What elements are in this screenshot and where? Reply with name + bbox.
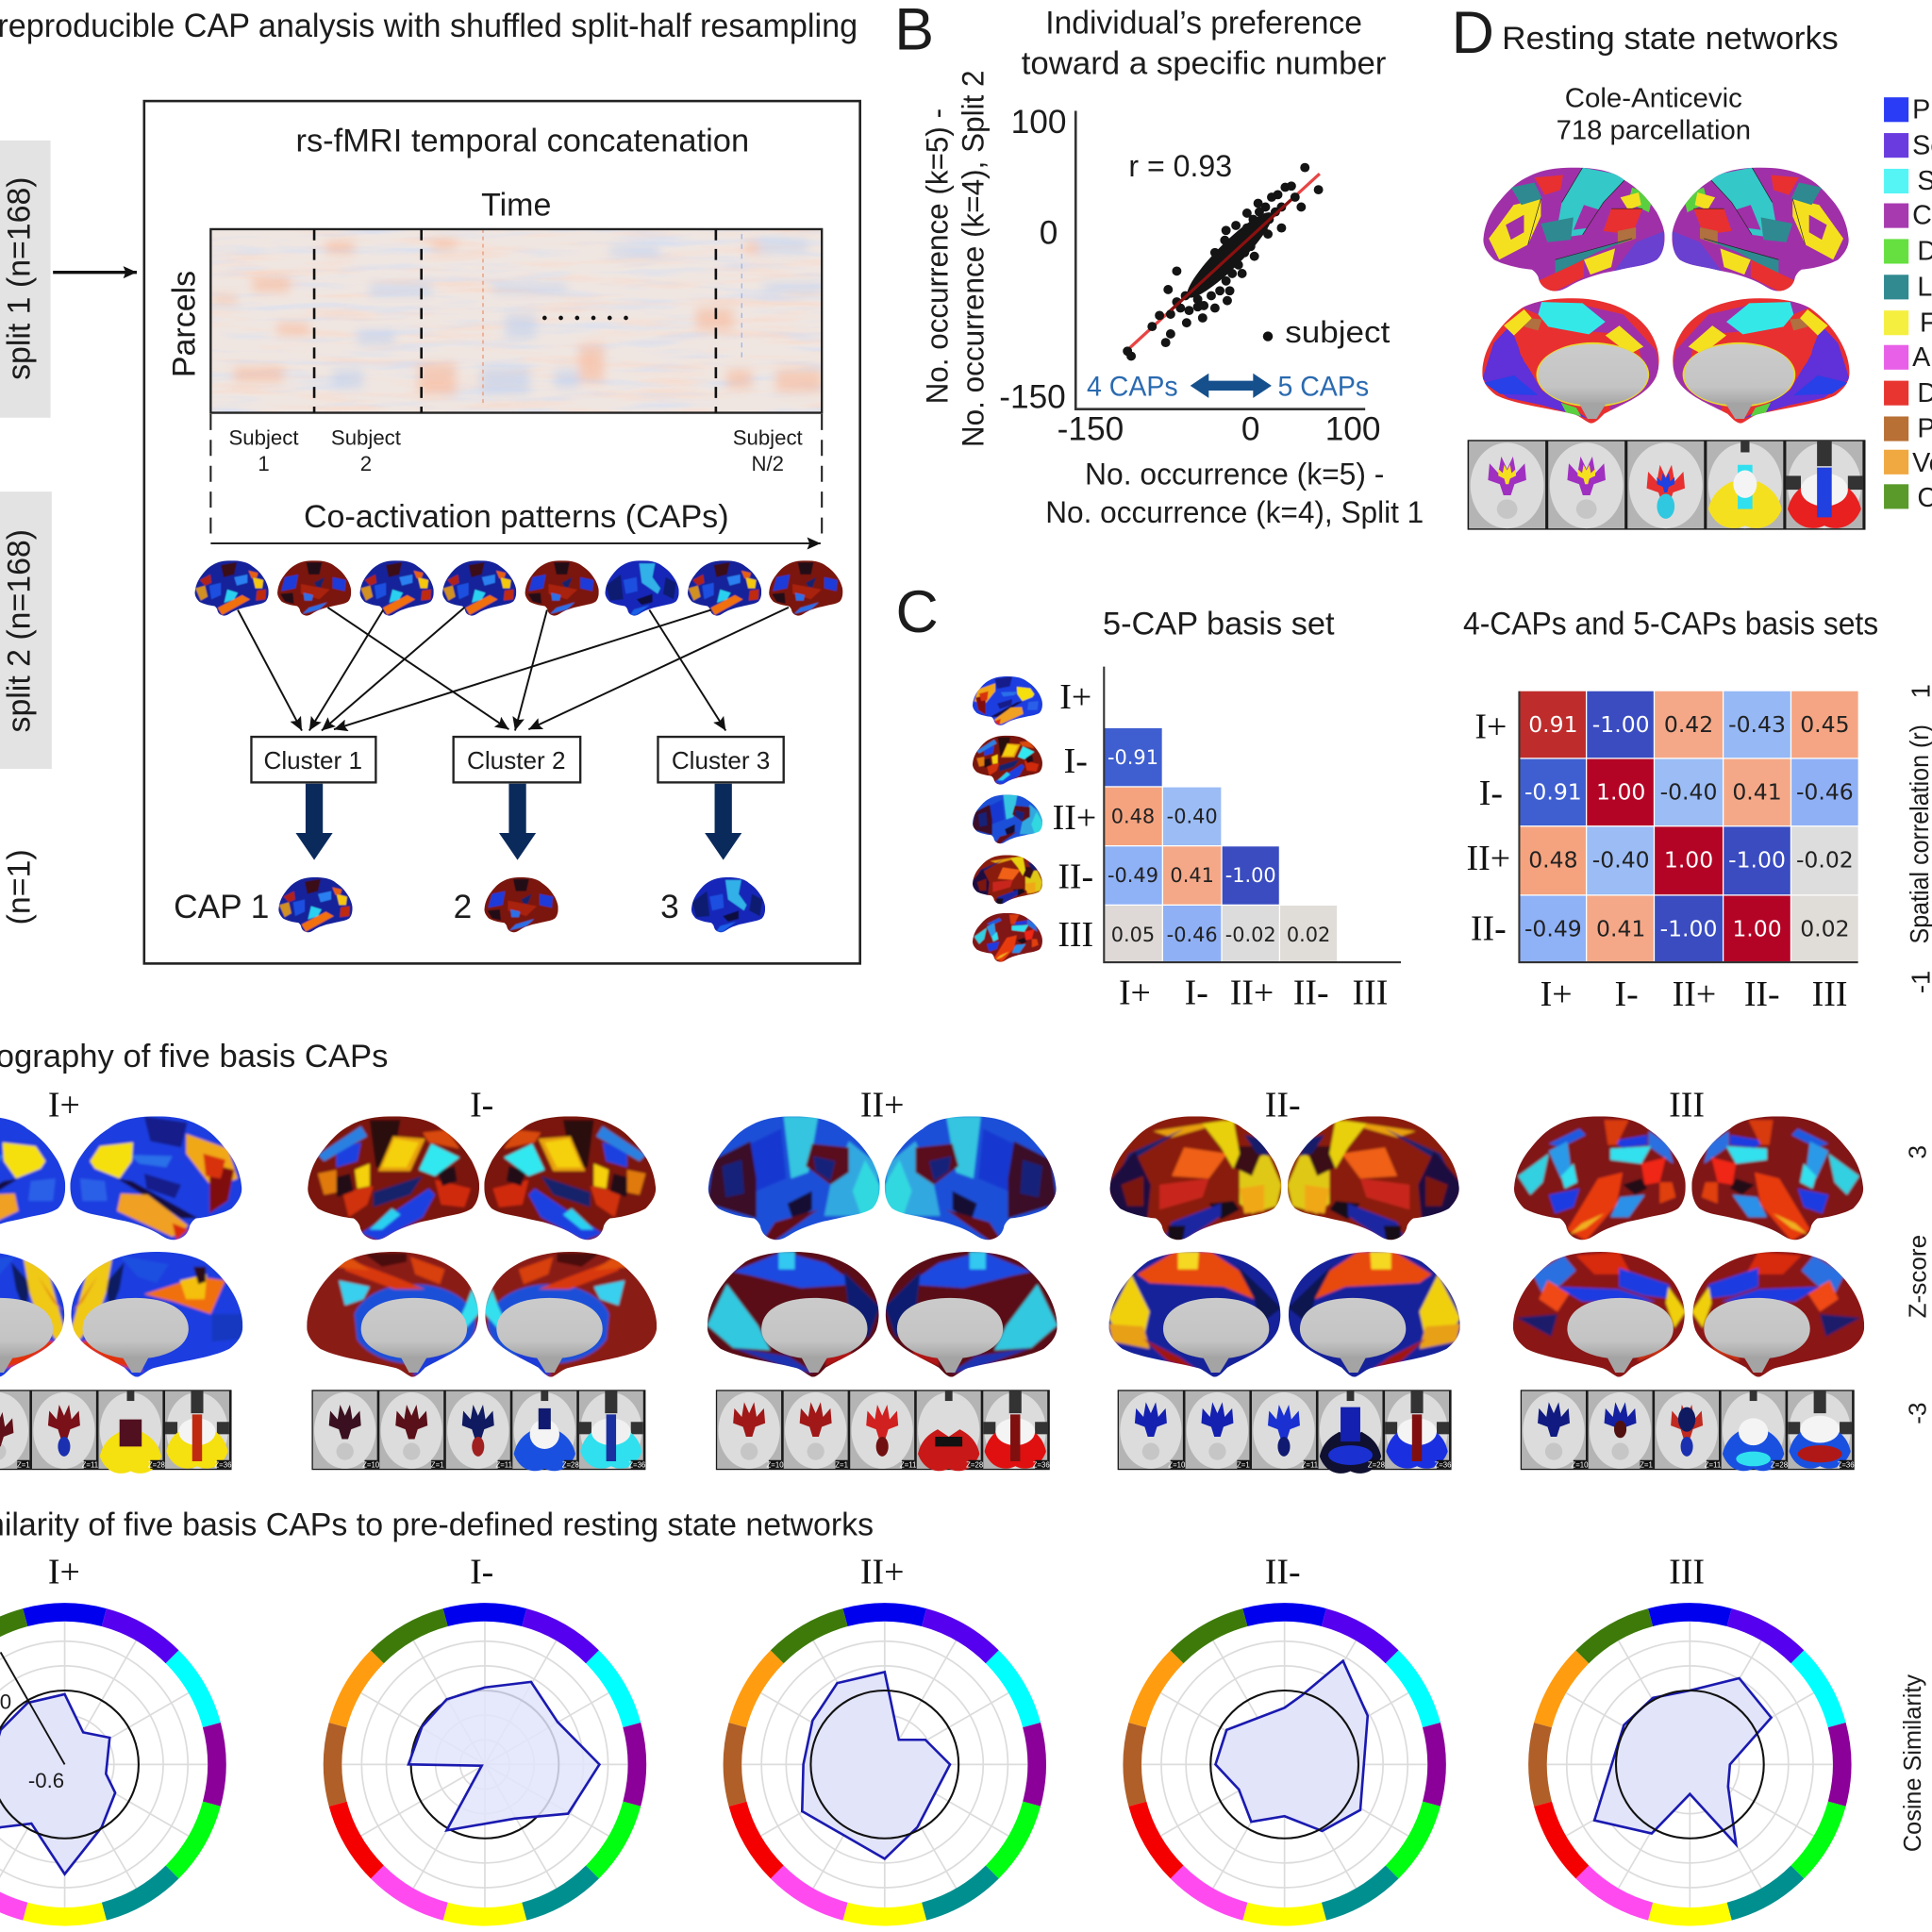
- colorbar label: cosine similarity: Cosine Similarity: [1898, 1674, 1926, 1852]
- cluster boxes: Cluster 1: [264, 746, 362, 774]
- row and column labels, right matrix: II-: [1471, 909, 1507, 949]
- tick labels: 0: [1040, 215, 1058, 252]
- subheading: parcellation: [1557, 84, 1751, 146]
- full matrix: 4-CAPs and 5-CAPs: -0.40: [1592, 847, 1650, 874]
- cluster boxes: Cluster 2: [467, 746, 566, 774]
- row and column labels, left matrix: II-: [1058, 858, 1093, 897]
- y axis label: No. occurrence (k=5) -: [919, 108, 954, 404]
- column labels: I-: [470, 1085, 493, 1124]
- panel letter C: C: [896, 579, 939, 645]
- radar: II-: [1132, 1612, 1437, 1917]
- colorbar labels: z-score: 3: [1903, 1145, 1931, 1158]
- triangular matrix: 5-CAP basis set: -0.46: [1167, 924, 1218, 946]
- full matrix: 4-CAPs and 5-CAPs: 0.42: [1664, 711, 1713, 738]
- slices: I+: [0, 1390, 232, 1474]
- annotation: 4 CAPs vs 5 CAPs: 5 CAPs: [1277, 371, 1369, 402]
- subject labels: Subject: [733, 426, 803, 450]
- full matrix: 4-CAPs and 5-CAPs: 1.00: [1664, 847, 1713, 874]
- triangular matrix: 5-CAP basis set: 0.48: [1111, 805, 1155, 827]
- heading: 5-CAP basis set: 5-CAP basis set: [1103, 607, 1335, 642]
- slices: II+: [716, 1390, 1050, 1471]
- full matrix: 4-CAPs and 5-CAPs: 0.41: [1732, 779, 1782, 806]
- panel letter D: D: [1452, 0, 1494, 66]
- axes: [1075, 111, 1365, 409]
- column labels: I-: [470, 1552, 493, 1591]
- bracket arrow: co-activation patterns: [210, 414, 822, 543]
- brain maps: II-: [1103, 1110, 1466, 1385]
- subject labels: Subject: [229, 426, 299, 450]
- legend: subject: subject: [1285, 314, 1390, 349]
- full matrix: 4-CAPs and 5-CAPs: -1.00: [1660, 916, 1717, 942]
- full matrix: 4-CAPs and 5-CAPs: -0.91: [1524, 779, 1582, 806]
- panel F: cosine similarity radars: [0, 1507, 1926, 1917]
- x axis label: No. occurrence (k=5) -: [1085, 456, 1384, 491]
- column labels: II+: [860, 1552, 904, 1591]
- network legend: L: [1917, 272, 1932, 302]
- network legend: C: [1912, 201, 1932, 231]
- row and column labels, left matrix: III: [1352, 973, 1388, 1012]
- full matrix: 4-CAPs and 5-CAPs: -0.02: [1796, 847, 1854, 874]
- row and column labels, left matrix: I-: [1064, 741, 1088, 781]
- triangular matrix: 5-CAP basis set: -0.91: [1108, 746, 1158, 769]
- correlation value: r = 0.93: [1128, 148, 1232, 183]
- tick labels: -150: [999, 378, 1066, 415]
- full matrix: 4-CAPs and 5-CAPs: -0.40: [1660, 779, 1717, 806]
- brain maps: I+: [0, 1110, 249, 1385]
- full matrix: 4-CAPs and 5-CAPs: 1.00: [1596, 779, 1645, 806]
- brain maps: I-: [301, 1110, 663, 1385]
- resulting CAPs: 3: [660, 889, 679, 925]
- slices: II-: [1118, 1390, 1452, 1474]
- radar: I+: -0.6: [28, 1769, 64, 1792]
- CAP brain icons: [970, 674, 1045, 966]
- full matrix: 4-CAPs and 5-CAPs: 1.00: [1732, 916, 1782, 942]
- panel A: reproducible CAP analysis: [0, 8, 860, 963]
- colorbar labels: z-score: -3: [1903, 1403, 1931, 1424]
- row and column labels, left matrix: I+: [1059, 677, 1091, 717]
- triangular matrix: 5-CAP basis set: 0.05: [1111, 924, 1155, 946]
- split 2 label: split 2 (n=168): [1, 529, 37, 732]
- triangular matrix: 5-CAP basis set: -0.40: [1167, 805, 1218, 827]
- column labels: III: [1669, 1552, 1705, 1591]
- column labels: II+: [860, 1085, 904, 1124]
- tick labels: 100: [1011, 104, 1066, 141]
- full matrix: 4-CAPs and 5-CAPs: [1519, 691, 1858, 962]
- cluster boxes: Cluster 3: [672, 746, 770, 774]
- radar: I-: [333, 1612, 637, 1917]
- thick arrows: cluster to CAP: [295, 784, 741, 860]
- arrows: brains to clusters: [238, 608, 789, 731]
- radar: I+: [0, 1612, 217, 1917]
- full matrix: 4-CAPs and 5-CAPs: 0.48: [1528, 847, 1578, 874]
- heading: individual's preference: toward a specific number: [1022, 45, 1386, 81]
- colorbar labels: z-score: Z-score: [1903, 1235, 1931, 1318]
- network legend: [1884, 94, 1932, 513]
- full matrix: 4-CAPs and 5-CAPs: -0.49: [1524, 916, 1582, 942]
- row and column labels, right matrix: III: [1812, 974, 1848, 1014]
- annotation: 4 CAPs vs 5 CAPs: [1087, 371, 1369, 402]
- radar: I+: 0: [0, 1690, 11, 1714]
- heading: panel A title: reproducible CAP analysis with shuffled split-half resampling: [0, 8, 858, 44]
- subject labels: Subject: [331, 426, 401, 450]
- x axis label: [1045, 456, 1424, 529]
- panel D: resting state networks: [1452, 0, 1932, 530]
- x axis label: No. occurrence (k=4), Split 1: [1045, 494, 1424, 529]
- column labels: I+: [48, 1552, 80, 1591]
- column labels: II-: [1265, 1085, 1301, 1124]
- resulting CAPs: [174, 874, 768, 937]
- annotation: 4 CAPs vs 5 CAPs: 4 CAPs: [1087, 371, 1178, 402]
- mini brains row: [192, 558, 845, 620]
- triangular matrix: 5-CAP basis set: -0.02: [1225, 924, 1276, 946]
- panel E: topography: [0, 1039, 1931, 1474]
- triangular matrix: 5-CAP basis set: [1104, 667, 1401, 962]
- label: Time: Time: [481, 188, 551, 224]
- subject labels: 2: [360, 452, 372, 475]
- full matrix: 4-CAPs and 5-CAPs: 0.45: [1800, 711, 1850, 738]
- subheading: parcellation: Cole-Anticevic: [1565, 84, 1742, 114]
- row and column labels, right matrix: I+: [1541, 974, 1573, 1014]
- row and column labels, left matrix: I+: [1119, 973, 1151, 1012]
- heatmap: parcels by time: [210, 229, 822, 413]
- heading: individual's preference: [1022, 5, 1386, 81]
- y axis label: [919, 70, 990, 447]
- label: co-activation patterns: Co-activation patterns (CAPs): [304, 499, 729, 535]
- colorbar labels: z-score: [1903, 1145, 1931, 1424]
- radar: II+: [732, 1612, 1037, 1917]
- tick labels: 100: [1325, 410, 1381, 447]
- brain maps: II+: [701, 1110, 1063, 1385]
- row and column labels, right matrix: I-: [1479, 774, 1503, 813]
- full matrix: 4-CAPs and 5-CAPs: 0.41: [1596, 916, 1645, 942]
- subject labels: 1: [258, 452, 270, 475]
- row and column labels, right matrix: I+: [1474, 707, 1507, 746]
- triangular matrix: 5-CAP basis set: 0.41: [1170, 864, 1214, 887]
- y axis label: No. occurrence (k=4), Split 2: [955, 70, 990, 447]
- tick labels: [999, 104, 1381, 447]
- triangular matrix: 5-CAP basis set: -0.49: [1108, 864, 1158, 887]
- radar: III: [1538, 1612, 1842, 1917]
- row and column labels, right matrix: [1467, 707, 1848, 1014]
- row and column labels, right matrix: I-: [1614, 974, 1639, 1014]
- full matrix: 4-CAPs and 5-CAPs: -0.43: [1728, 711, 1786, 738]
- heading: 4-CAPs and 5-CAPs: 4-CAPs and 5-CAPs basis sets: [1463, 607, 1878, 642]
- column labels: I+: [48, 1085, 80, 1124]
- split 1 label: [0, 141, 51, 418]
- triangular matrix: 5-CAP basis set: 0.02: [1287, 924, 1330, 946]
- heading: rs-fMRI: rs-fMRI temporal concatenation: [295, 124, 749, 159]
- full matrix: 4-CAPs and 5-CAPs: 0.02: [1800, 916, 1850, 942]
- resulting CAPs: 2: [454, 889, 472, 925]
- row and column labels, left matrix: II+: [1230, 973, 1274, 1012]
- atlas slices: [1468, 440, 1866, 530]
- column labels: [48, 1085, 1705, 1124]
- row and column labels, left matrix: II+: [1053, 798, 1096, 838]
- row and column labels, left matrix: I-: [1185, 973, 1208, 1012]
- tick labels: 0: [1241, 410, 1260, 447]
- label: Parcels: Parcels: [166, 271, 202, 377]
- full matrix: 4-CAPs and 5-CAPs: -1.00: [1728, 847, 1786, 874]
- row and column labels, right matrix: II+: [1673, 974, 1716, 1014]
- panel C: correlation matrices: [896, 579, 1932, 1014]
- n=1 label: (n=1): [1, 849, 37, 924]
- split 1 label: split 1 (n=168): [1, 176, 37, 380]
- column labels: III: [1669, 1085, 1705, 1124]
- heading: individual's preference: Individual’s preference: [1045, 5, 1362, 41]
- row and column labels, left matrix: III: [1058, 915, 1093, 955]
- slices: I-: [311, 1390, 646, 1471]
- tick labels: -150: [1058, 410, 1124, 447]
- column labels: [48, 1552, 1705, 1591]
- brain atlas views: [1475, 161, 1856, 431]
- brain maps: III: [1507, 1110, 1871, 1385]
- full matrix: 4-CAPs and 5-CAPs: -0.46: [1796, 779, 1854, 806]
- row and column labels, left matrix: II-: [1293, 973, 1329, 1012]
- slices: III: [1521, 1390, 1855, 1471]
- triangular matrix: 5-CAP basis set: -1.00: [1225, 864, 1276, 887]
- row and column labels, right matrix: II-: [1744, 974, 1780, 1014]
- subject labels: N/2: [751, 452, 784, 475]
- subheading: parcellation: 718 parcellation: [1557, 116, 1751, 146]
- split 2 label: [0, 491, 52, 769]
- resulting CAPs: CAP 1: [174, 889, 269, 925]
- heading: resting state networks: Resting state networks: [1502, 21, 1839, 57]
- cluster boxes: [251, 737, 784, 782]
- scatter points: [1126, 168, 1320, 356]
- box: temporal concatenation workflow: [144, 101, 860, 963]
- full matrix: 4-CAPs and 5-CAPs: -1.00: [1592, 711, 1650, 738]
- panel B: scatter: [894, 0, 1424, 529]
- subject labels: [229, 426, 803, 475]
- arrow: split 1 to box: [53, 271, 137, 274]
- column labels: II-: [1265, 1552, 1301, 1591]
- row and column labels, right matrix: II+: [1467, 839, 1510, 878]
- row and column labels, left matrix: [1053, 677, 1388, 1012]
- full matrix: 4-CAPs and 5-CAPs: 0.91: [1528, 711, 1578, 738]
